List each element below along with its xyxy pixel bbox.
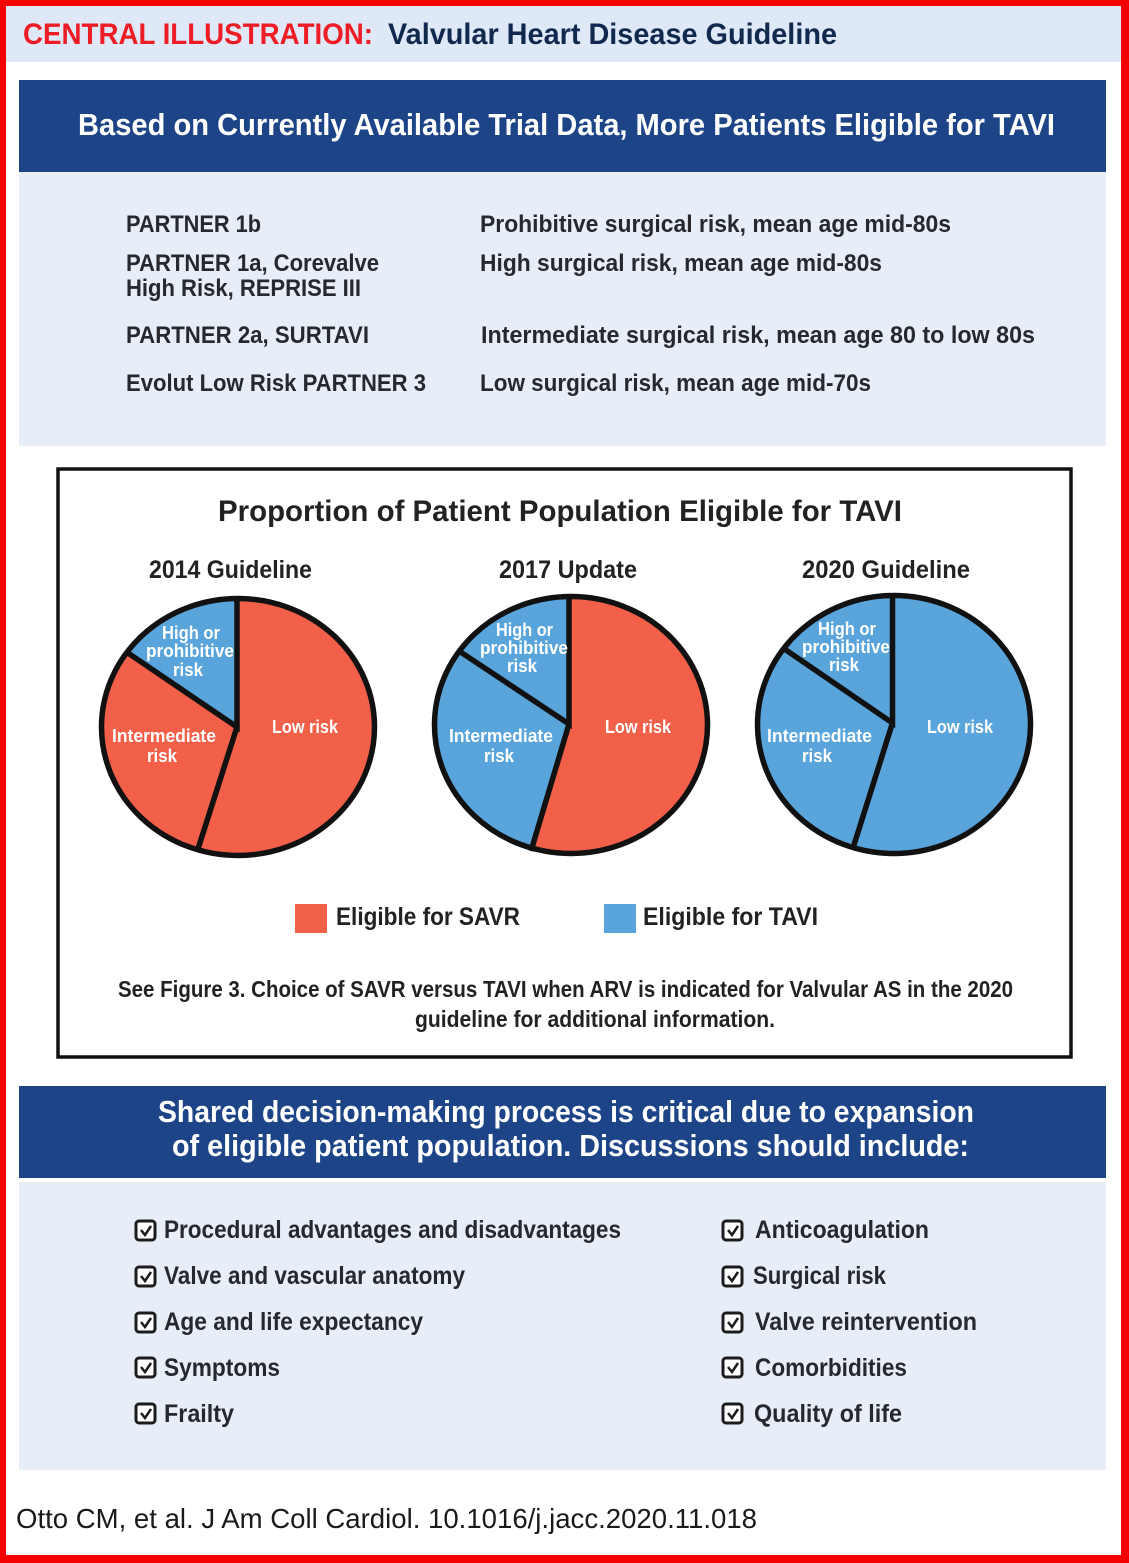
title: Valvular Heart Disease Guideline: [388, 18, 837, 51]
row: Evolut Low Risk: [126, 370, 871, 397]
pie chart: 2020 guideline: prohibitive: [802, 637, 890, 657]
pie chart: 2017 update: Intermediate: [449, 726, 553, 746]
heading banner: shared decision-making: Shared decision-making process is critical due to expansion: [158, 1094, 974, 1129]
pie chart: 2014 guideline: Low risk: [272, 717, 339, 737]
checklist: right column: Comorbidities: [755, 1354, 907, 1382]
note text: See Figure 3. Choice of SAVR versus TAVI when ARV is indicated for Valvular AS in the 2020: [118, 976, 1013, 1002]
pie chart: 2020 guideline: risk: [829, 655, 860, 675]
checklist: left column: Procedural advantages and disadvantages: [164, 1216, 621, 1244]
pie chart: 2020 guideline: risk: [802, 746, 833, 766]
checklist: right column: Quality of life: [754, 1400, 902, 1428]
row: PARTNER 1a: PARTNER 1a, Corevalve: [126, 250, 379, 277]
pie chart: 2017 update: prohibitive: [480, 638, 568, 658]
checklist: left column: Symptoms: [164, 1354, 280, 1382]
pie chart: 2020 guideline: [758, 556, 1030, 854]
row: PARTNER 1b: Prohibitive surgical risk, mean age mid-80s: [480, 211, 951, 238]
pie chart: 2020 guideline: High or: [818, 619, 876, 639]
heading banner: trial data: [19, 80, 1106, 172]
legend: Eligible for TAVI: [643, 903, 818, 931]
header band: [6, 6, 1121, 62]
title label: CENTRAL ILLUSTRATION:: [23, 18, 373, 51]
panel: discussion checklist: [19, 1182, 1106, 1470]
heading banner: shared decision-making: [19, 1086, 1106, 1178]
row: PARTNER 1b: PARTNER 1b: [126, 211, 261, 238]
checklist: left column: Frailty: [164, 1400, 234, 1428]
row: PARTNER 2a: Intermediate surgical risk, mean age 80 to low 80s: [481, 322, 1035, 349]
pie chart: 2017 update: risk: [507, 656, 538, 676]
pie chart: 2014 guideline: [102, 556, 374, 856]
pie chart: 2020 guideline: Intermediate: [767, 726, 872, 746]
legend: [295, 903, 818, 933]
row: Evolut Low Risk: Evolut Low Risk PARTNER 3: [126, 370, 426, 397]
heading banner: shared decision-making: of eligible patient population. Discussions should include:: [172, 1128, 969, 1163]
pie chart: 2017 update: [434, 556, 708, 854]
row: PARTNER 2a: PARTNER 2a, SURTAVI: [126, 322, 369, 349]
citation: Otto CM, et al. J Am Coll Cardiol. 10.1016/j.jacc.2020.11.018: [16, 1503, 757, 1534]
row: PARTNER 1a: High Risk, REPRISE III: [126, 275, 361, 302]
row: PARTNER 2a: [126, 322, 1035, 349]
note text: [118, 976, 1013, 1032]
pie chart: 2014 guideline: prohibitive: [146, 641, 234, 661]
pie chart: 2014 guideline: High or: [162, 623, 220, 643]
chart heading: Proportion of Patient Population Eligible for TAVI: [218, 495, 902, 528]
pie chart: 2017 update: High or: [496, 620, 553, 640]
checklist: left column: Valve and vascular anatomy: [164, 1262, 465, 1290]
row: PARTNER 1b: [126, 211, 951, 238]
row: PARTNER 1a: [126, 250, 882, 302]
checklist: right column: Surgical risk: [753, 1262, 886, 1290]
pie chart: 2014 guideline: 2014 Guideline: [149, 556, 312, 584]
panel: pie charts: [58, 469, 1071, 1057]
checklist: left column: Age and life expectancy: [164, 1308, 423, 1336]
pie chart: 2014 guideline: Intermediate: [112, 726, 216, 746]
checklist: right column: Anticoagulation: [755, 1216, 929, 1244]
pie chart: 2014 guideline: risk: [147, 746, 178, 766]
checklist: right column: [753, 1216, 977, 1428]
row: Evolut Low Risk: Low surgical risk, mean age mid-70s: [480, 370, 871, 397]
pie chart: 2017 update: risk: [484, 746, 515, 766]
pie chart: 2017 update: Low risk: [605, 717, 672, 737]
pie chart: 2014 guideline: risk: [173, 660, 204, 680]
note text: guideline for additional information.: [415, 1006, 775, 1032]
pie chart: 2020 guideline: Low risk: [927, 717, 994, 737]
checkbox icons: [136, 1221, 742, 1423]
pie chart: 2017 update: 2017 Update: [499, 556, 637, 584]
pie chart: 2020 guideline: 2020 Guideline: [802, 556, 970, 584]
heading banner: trial data: Based on Currently Available Trial Data, More Patients Eligible for TAVI: [78, 107, 1055, 142]
panel: trial list: [19, 172, 1106, 446]
checklist: left column: [164, 1216, 621, 1428]
row: PARTNER 1a: High surgical risk, mean age mid-80s: [480, 250, 882, 277]
legend: Eligible for SAVR: [336, 903, 520, 931]
checklist: right column: Valve reintervention: [755, 1308, 977, 1336]
